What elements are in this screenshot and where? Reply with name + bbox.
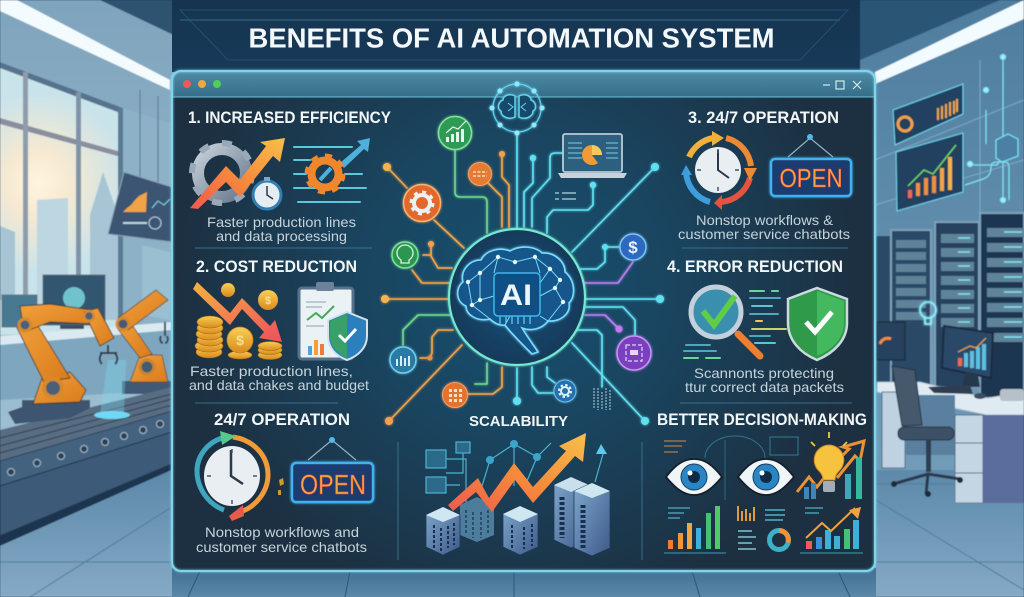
hub circle [449, 229, 585, 365]
floor right [860, 470, 1024, 597]
wall chart panels [893, 84, 963, 211]
heading: 1. INCREASED EFFICIENCY [188, 109, 391, 127]
icon: coins with falling arrow [193, 282, 282, 360]
icon: clock with cycle arrows [197, 431, 268, 521]
icon: orange gear with speed lines [294, 138, 370, 202]
icon node: growth chart [438, 116, 472, 150]
icon node: orange gear [404, 184, 440, 222]
section: 1. increased efficiency [188, 109, 391, 244]
icon: coins with falling arrow: $ [265, 295, 271, 307]
icon node: orange grid [442, 382, 468, 408]
icon node: blue servers [390, 347, 416, 373]
description line 2: customer service chatbots [678, 226, 850, 242]
icon: coins with falling arrow: $ [236, 332, 244, 348]
icon: small sparkle [278, 478, 284, 495]
floor left [0, 470, 180, 597]
description line 2: customer service chatbots [196, 539, 367, 555]
icon: server buildings [426, 477, 610, 556]
description: Scannonts protecting [694, 365, 834, 381]
background: right server room [860, 0, 1024, 597]
desk along window [0, 326, 172, 400]
neural brain [458, 247, 574, 354]
heading: 2. COST REDUCTION [196, 258, 357, 276]
far robot arm [117, 290, 172, 394]
AI chip: AI [500, 279, 532, 312]
section: 3. 24/7 operation [678, 109, 851, 242]
icon: open sign: OPEN [300, 469, 366, 500]
icon: green shield [788, 288, 847, 360]
description line 2: and data chakes and budget [189, 377, 369, 393]
ceiling light strip [0, 0, 170, 90]
icon: eyes [666, 459, 794, 495]
section: better decision-making [657, 411, 867, 553]
window controls [823, 81, 861, 89]
icon: laptop with pie chart [558, 134, 627, 178]
circuit overlay [965, 54, 1018, 202]
node dots [381, 151, 664, 425]
chart: bars left [664, 506, 726, 553]
window title bar [172, 71, 875, 97]
icon: code lines [684, 291, 786, 358]
heading: SCALABILITY [469, 413, 568, 430]
chart: bars with trend [800, 507, 863, 553]
description: Faster production lines [207, 214, 356, 230]
hanging dashboard monitor [108, 90, 172, 242]
desk with drawers [877, 382, 1024, 503]
icon: rising arrow [448, 433, 586, 512]
icon: open sign [292, 437, 373, 502]
background: top centre ceiling [172, 0, 876, 72]
icon node: dollar: $ [628, 238, 638, 257]
heading: BETTER DECISION-MAKING [657, 411, 867, 429]
section: 4. error reduction [667, 258, 847, 395]
server racks [876, 213, 1024, 398]
chart: small bars and donut [738, 506, 788, 550]
section: 24/7 operation bottom [196, 411, 373, 555]
window dots [183, 80, 221, 88]
window with sun and skyline [0, 62, 123, 335]
description: Nonstop workflows & [696, 212, 834, 228]
floor centre [172, 568, 876, 597]
small data marks [555, 193, 610, 410]
icon: clock with cycle arrows [681, 131, 757, 210]
circuit lines: orange and green, left [385, 150, 509, 421]
window border [172, 71, 875, 571]
glowing bulb [920, 302, 936, 324]
icon: gear with rising arrow and stopwatch [190, 138, 285, 209]
office chair [891, 366, 963, 497]
section: 2. cost reduction [189, 258, 369, 393]
section: scalability [426, 413, 610, 556]
panel: application window [172, 71, 875, 571]
icon: magnifier with check [691, 287, 760, 356]
icon: clipboard with shield [299, 282, 367, 360]
description: Nonstop workflows and [205, 524, 359, 540]
description line 2: and data processing [216, 228, 347, 244]
heading: 4. ERROR REDUCTION [667, 258, 843, 276]
icon node: dollar [620, 234, 646, 260]
heading: 24/7 OPERATION [214, 411, 350, 429]
conveyor belt [0, 360, 172, 546]
icon: data backdrop [664, 436, 798, 500]
icon node: blue gear [554, 380, 576, 402]
heading: 3. 24/7 OPERATION [688, 109, 839, 127]
icon node: light bulb [392, 242, 418, 268]
icon node: purple frame [617, 336, 651, 370]
diagram: central AI hub [381, 82, 664, 425]
icon node: orange small chip [468, 162, 492, 186]
icon: light bulb with arrow and bars [797, 432, 864, 499]
desk monitors [2, 275, 105, 329]
title: BENEFITS OF AI AUTOMATION SYSTEM [248, 22, 774, 54]
top brain node [490, 82, 544, 136]
monitors [877, 322, 993, 387]
icon: network and documents [426, 440, 607, 507]
icon: open sign [771, 134, 851, 196]
description line 2: ttur correct data packets [685, 379, 844, 395]
circuit lines: cyan and purple, right [517, 133, 660, 421]
ceiling frame lines [180, 10, 848, 60]
background: left factory scene [0, 0, 180, 597]
ceiling light strip right [875, 0, 1024, 84]
description: Faster production lines, [190, 363, 353, 379]
near robot arm [8, 304, 117, 424]
icon: open sign: OPEN [780, 163, 842, 193]
